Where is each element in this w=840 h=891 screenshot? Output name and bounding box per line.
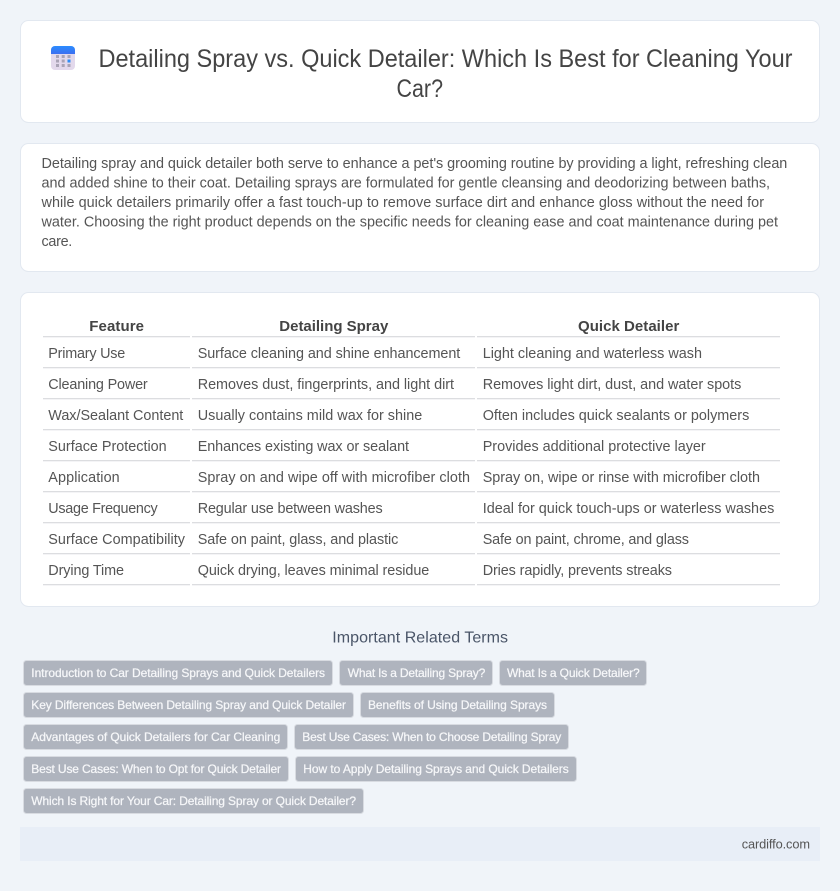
row: primary use xyxy=(43,346,780,368)
tag: introduction xyxy=(24,660,332,686)
tag: how to apply: How to Apply Detailing Sprays and Quick Detailers xyxy=(303,762,569,776)
row: cleaning power: Removes dust, fingerprints, and light dirt xyxy=(198,377,454,393)
row: wax and sealant content: Often includes quick sealants or polymers xyxy=(483,408,749,424)
tag: benefits xyxy=(360,692,554,718)
intro paragraph xyxy=(40,156,787,250)
row: usage frequency: Usage Frequency xyxy=(48,501,158,517)
footer source text: cardiffo.com xyxy=(742,836,810,851)
tag: which is right xyxy=(24,788,364,814)
tag: quick detailer definition: What Is a Quick Detailer? xyxy=(507,666,640,680)
table header row: Quick Detailer xyxy=(578,318,679,335)
tag: advantages xyxy=(24,724,288,750)
row: surface protection xyxy=(43,439,780,461)
row: primary use: Surface cleaning and shine enhancement xyxy=(198,346,460,362)
tag: benefits: Benefits of Using Detailing Sprays xyxy=(368,698,547,712)
row: drying time: Quick drying, leaves minimal residue xyxy=(198,563,429,579)
row: usage frequency: Ideal for quick touch-ups or waterless washes xyxy=(483,501,774,517)
panel: comparison table xyxy=(20,292,820,606)
footer xyxy=(20,827,820,861)
tag: use cases spray: Best Use Cases: When to Choose Detailing Spray xyxy=(302,730,561,744)
panel: header xyxy=(20,20,820,122)
tag: detailing spray definition xyxy=(340,660,492,686)
icon: calendar xyxy=(51,46,75,70)
intro paragraph: and added shine to their coat. Detailing sprays are formulated for gentle cleansing and deodorizing between baths, xyxy=(42,176,770,192)
tag: use cases quick detailer xyxy=(24,756,288,782)
tag: how to apply xyxy=(296,756,576,782)
row: primary use: Light cleaning and waterless wash xyxy=(483,346,702,362)
row: application xyxy=(43,470,780,492)
panel: introduction xyxy=(20,144,820,272)
row: surface compatibility: Safe on paint, glass, and plastic xyxy=(198,532,398,548)
tag: key differences: Key Differences Between Detailing Spray and Quick Detailer xyxy=(31,698,346,712)
row: cleaning power: Cleaning Power xyxy=(48,377,148,393)
tag: use cases quick detailer: Best Use Cases: When to Opt for Quick Detailer xyxy=(31,762,281,776)
title xyxy=(98,45,792,103)
row: wax and sealant content: Usually contains mild wax for shine xyxy=(198,408,422,424)
row: wax and sealant content xyxy=(43,408,780,430)
table header row: Detailing Spray xyxy=(279,318,389,335)
row: usage frequency xyxy=(43,501,780,523)
row: cleaning power xyxy=(43,377,780,399)
row: usage frequency: Regular use between washes xyxy=(198,501,383,517)
row: surface compatibility xyxy=(43,532,780,554)
intro paragraph: care. xyxy=(42,234,72,250)
row: surface compatibility: Safe on paint, chrome, and glass xyxy=(483,532,689,548)
row: surface compatibility: Surface Compatibility xyxy=(48,532,186,548)
tag: introduction: Introduction to Car Detailing Sprays and Quick Detailers xyxy=(31,666,325,680)
table header row: Feature xyxy=(89,318,144,335)
row: application: Spray on and wipe off with microfiber cloth xyxy=(198,470,470,486)
tag: quick detailer definition xyxy=(500,660,646,686)
row: application: Spray on, wipe or rinse with microfiber cloth xyxy=(483,470,760,486)
tag: which is right: Which Is Right for Your Car: Detailing Spray or Quick Detailer? xyxy=(31,794,356,808)
related terms tags xyxy=(24,660,646,814)
row: primary use: Primary Use xyxy=(48,346,125,362)
row: surface protection: Provides additional protective layer xyxy=(483,439,706,455)
intro paragraph: Detailing spray and quick detailer both serve to enhance a pet's grooming routine by providing a light, refreshing clean xyxy=(42,156,787,172)
row: wax and sealant content: Wax/Sealant Content xyxy=(48,408,183,424)
row: drying time: Dries rapidly, prevents streaks xyxy=(483,563,672,579)
intro paragraph: while quick detailers primarily offer a fast touch-up to remove surface dirt and enhance gloss without the need for xyxy=(40,195,764,211)
row: drying time xyxy=(43,563,780,585)
row: surface protection: Surface Protection xyxy=(48,439,167,455)
heading: important related terms: Important Related Terms xyxy=(332,630,508,647)
tag: detailing spray definition: What Is a Detailing Spray? xyxy=(348,666,486,680)
title: Detailing Spray vs. Quick Detailer: Which Is Best for Cleaning Your xyxy=(98,45,792,73)
title: Car? xyxy=(396,75,443,103)
table header row xyxy=(43,318,780,337)
row: surface protection: Enhances existing wax or sealant xyxy=(198,439,409,455)
row: application: Application xyxy=(48,470,120,486)
row: drying time: Drying Time xyxy=(48,563,124,579)
row: cleaning power: Removes light dirt, dust, and water spots xyxy=(483,377,741,393)
tag: use cases spray xyxy=(294,724,568,750)
intro paragraph: water. Choosing the right product depends on the specific needs for cleaning ease and coat maintenance during pet xyxy=(40,214,778,230)
tag: key differences xyxy=(24,692,354,718)
tag: advantages: Advantages of Quick Detailers for Car Cleaning xyxy=(31,730,280,744)
